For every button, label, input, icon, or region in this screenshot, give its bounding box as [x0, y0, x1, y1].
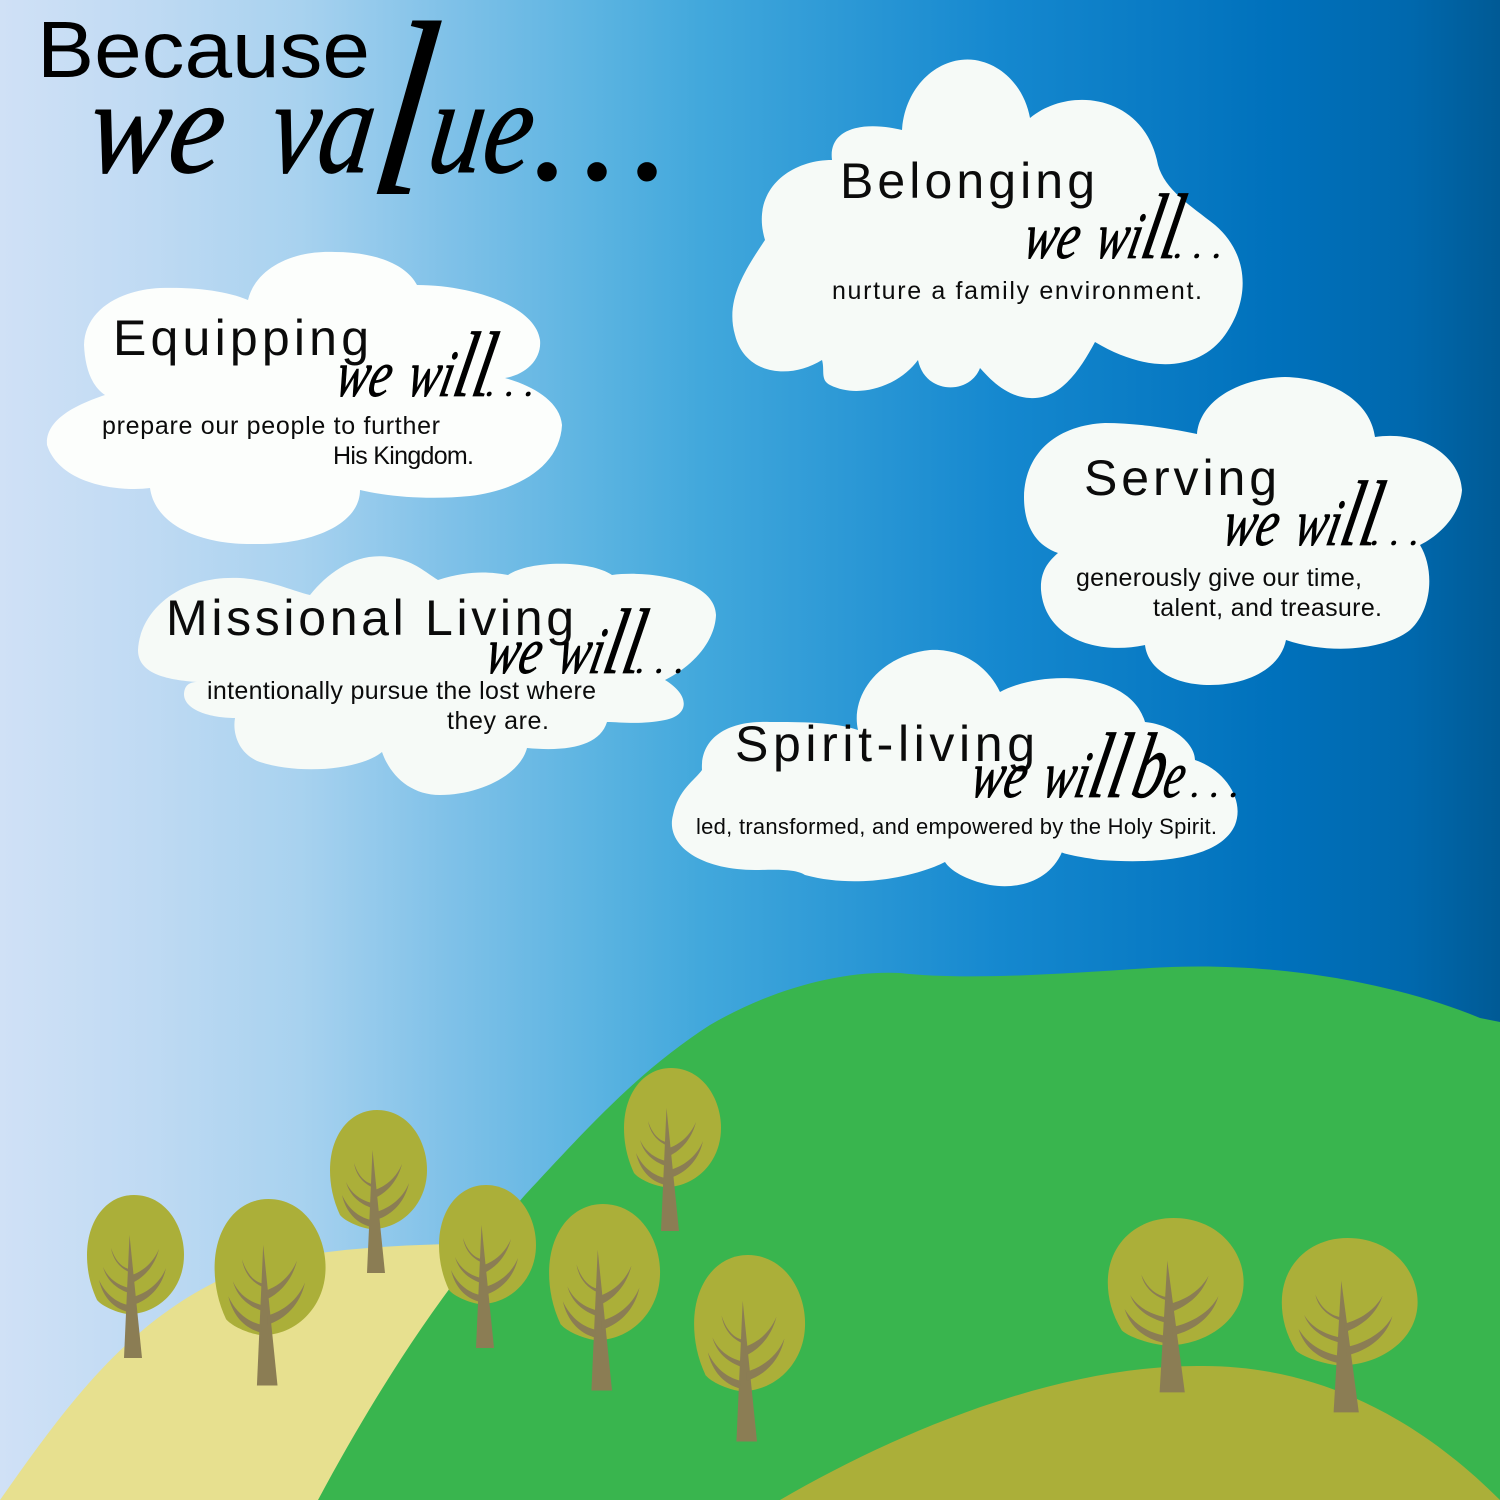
- green hill: [318, 966, 1500, 1500]
- panel: Spirit-living cloud: [672, 650, 1266, 886]
- panel: Serving cloud: generously give our time,: [1076, 564, 1362, 592]
- panel: Spirit-living cloud: be: [1125, 715, 1198, 818]
- panel: Serving cloud: will: [1288, 463, 1392, 566]
- panel: Missional Living cloud: Missional Living: [166, 590, 574, 646]
- tree 7: [694, 1255, 805, 1441]
- panel: Belonging cloud: [732, 59, 1249, 398]
- panel: Belonging cloud: nurture a family environment.: [832, 277, 1202, 305]
- title: ue: [421, 53, 545, 202]
- tree 1: [87, 1195, 184, 1358]
- tree 5: [549, 1204, 660, 1390]
- panel: Serving cloud: [1024, 377, 1462, 685]
- title: ...: [532, 73, 682, 206]
- panel: Belonging cloud: will: [1089, 176, 1193, 279]
- panel: Missional Living cloud: we: [480, 616, 550, 688]
- panel: Spirit-living cloud: we: [965, 740, 1035, 812]
- panel: Spirit-living cloud: led, transformed, and empowered by the Holy Spirit.: [696, 814, 1217, 839]
- panel: Equipping cloud: we: [330, 339, 400, 411]
- panel: Belonging cloud: ...: [1172, 231, 1237, 265]
- olive foreground hill: [780, 1366, 1500, 1500]
- pale yellow path: [0, 1243, 490, 1500]
- panel: Spirit-living cloud: ...: [1189, 770, 1254, 804]
- panel: Belonging cloud: Belonging: [840, 153, 1095, 209]
- tree 9: [1282, 1238, 1418, 1412]
- panel: Serving cloud: we: [1217, 488, 1287, 560]
- tree 8: [1108, 1218, 1244, 1392]
- panel: Equipping cloud: Equipping: [113, 310, 369, 366]
- panel: Missional Living cloud: intentionally pursue the lost where: [207, 677, 596, 705]
- panel: Spirit-living cloud: Spirit-living: [735, 716, 1035, 772]
- panel: Serving cloud: talent, and treasure.: [1153, 594, 1382, 622]
- panel: Equipping cloud: His Kingdom.: [333, 442, 474, 470]
- title: Because: [37, 5, 370, 94]
- title: we: [80, 53, 236, 202]
- tree 3: [330, 1110, 427, 1273]
- panel: Equipping cloud: prepare our people to further: [102, 412, 440, 440]
- panel: Equipping cloud: will: [401, 314, 505, 417]
- panel: Serving cloud: Serving: [1084, 450, 1277, 506]
- panel: Spirit-living cloud: will: [1036, 715, 1140, 818]
- panel: Missional Living cloud: they are.: [447, 707, 549, 735]
- panel: Equipping cloud: ...: [484, 369, 549, 403]
- tree 6: [624, 1068, 721, 1231]
- panel: Missional Living cloud: ...: [634, 646, 699, 680]
- panel: Missional Living cloud: will: [551, 591, 655, 694]
- tree 4: [439, 1185, 536, 1348]
- title: [37, 0, 682, 249]
- panel: Serving cloud: ...: [1369, 518, 1434, 552]
- panel: Equipping cloud: [47, 252, 562, 544]
- tree 2: [215, 1199, 326, 1385]
- title: va: [262, 53, 410, 202]
- panel: Belonging cloud: we: [1018, 201, 1088, 273]
- panel: Missional Living cloud: [138, 556, 716, 795]
